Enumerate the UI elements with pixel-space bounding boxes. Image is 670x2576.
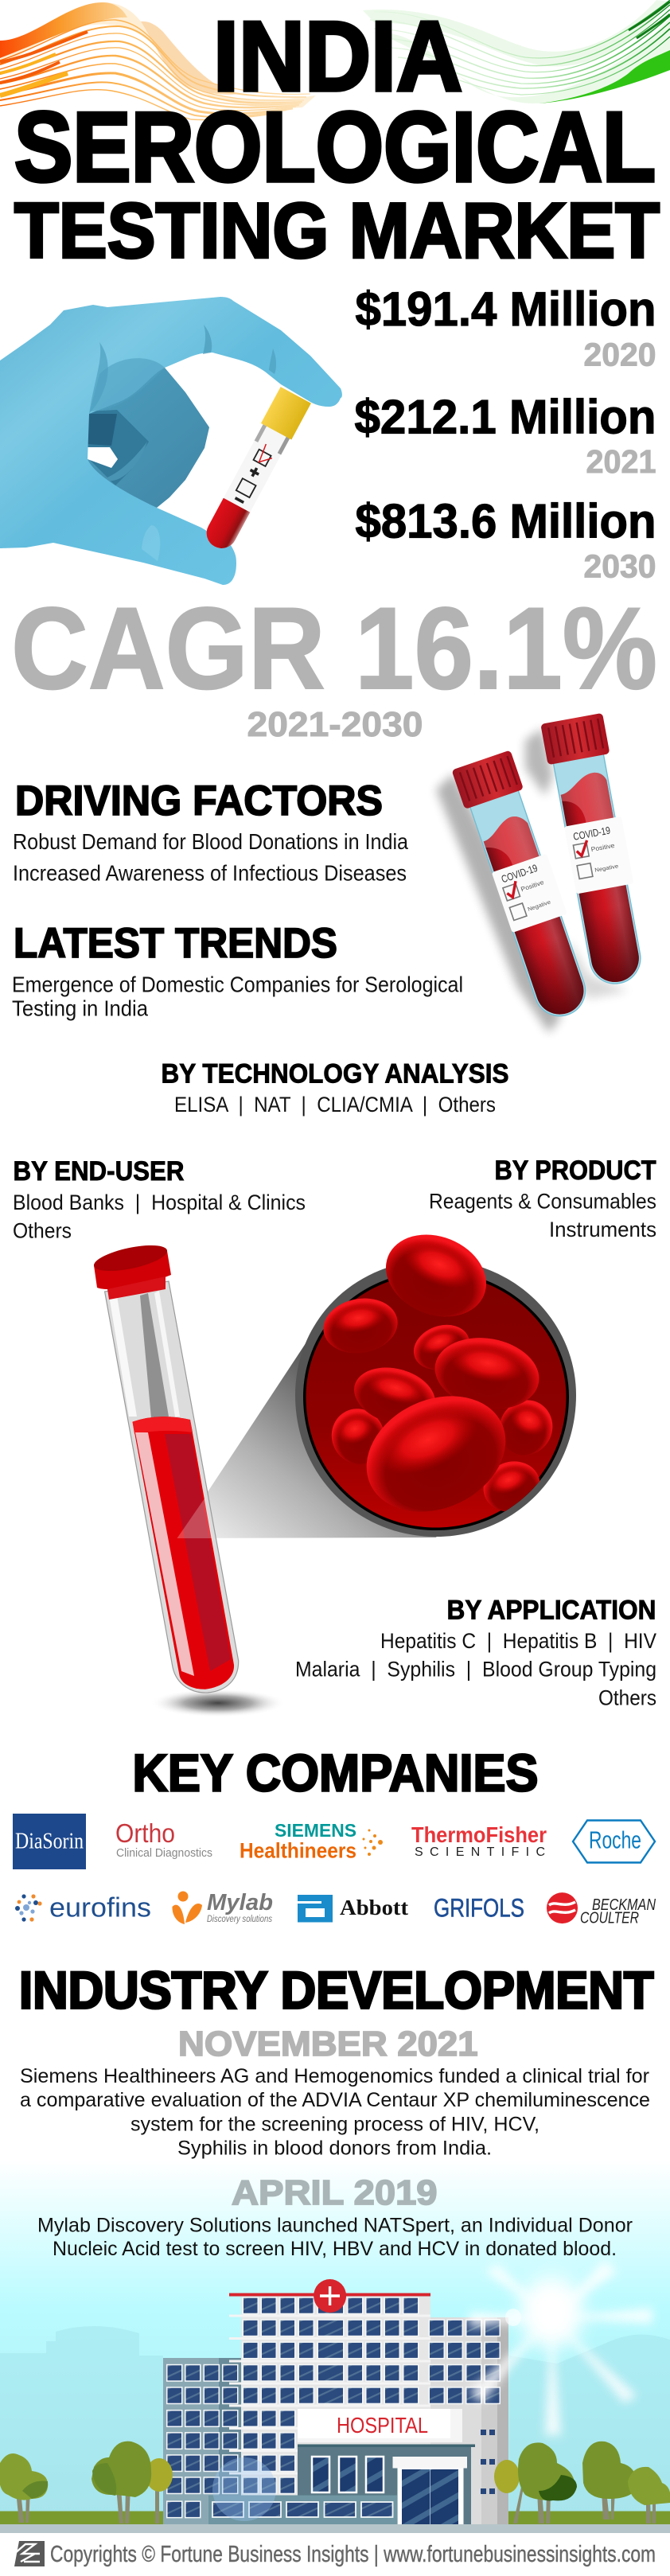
market value 2021: 2021 bbox=[586, 443, 656, 480]
latest trends: Emergence of Domestic Companies for Serological bbox=[12, 972, 463, 996]
hospital sign bbox=[298, 2409, 462, 2442]
latest trends: LATEST TRENDS bbox=[14, 920, 337, 967]
logo: Thermo Fisher Scientific: SCIENTIFIC bbox=[415, 1845, 545, 1859]
tall windows bbox=[312, 2457, 384, 2492]
tube: right: COVID-19 bbox=[572, 824, 611, 843]
logo: Ortho: Ortho bbox=[115, 1818, 175, 1848]
trees left bbox=[0, 2442, 173, 2523]
trees right bbox=[494, 2442, 670, 2523]
background skyline bbox=[0, 2326, 670, 2515]
by end-user bbox=[13, 1156, 306, 1243]
development: April 2019 bbox=[37, 2173, 633, 2260]
development: November 2021: NOVEMBER 2021 bbox=[178, 2025, 477, 2064]
magnified blood cells bbox=[208, 1235, 576, 1538]
road bbox=[0, 2524, 670, 2533]
tube: left: Negative bbox=[527, 900, 551, 913]
windows bbox=[166, 2297, 501, 2518]
small side windows bbox=[481, 2430, 495, 2494]
logo: Beckman Coulter: COULTER bbox=[580, 1910, 639, 1927]
entrance door bbox=[393, 2457, 467, 2524]
logo: Siemens Healthineers: SIEMENS bbox=[275, 1820, 356, 1841]
logo: DiaSorin: DiaSorin bbox=[15, 1829, 84, 1854]
logo: Siemens Healthineers: Healthineers bbox=[240, 1838, 356, 1862]
logo: Ortho bbox=[115, 1818, 212, 1860]
big test tube bbox=[92, 1241, 286, 1717]
icon: covid blood tubes bbox=[436, 713, 651, 1033]
by application: Others bbox=[598, 1686, 656, 1709]
logo: Grifols: GRIFOLS bbox=[434, 1894, 524, 1923]
logo: Roche bbox=[573, 1821, 655, 1862]
logo: Roche: Roche bbox=[589, 1826, 641, 1854]
latest trends bbox=[12, 920, 463, 1020]
main tower bbox=[241, 2297, 430, 2527]
title bbox=[14, 2, 660, 274]
flag wave: green bbox=[363, 0, 670, 103]
by end-user: Others bbox=[13, 1219, 72, 1243]
by product: BY PRODUCT bbox=[495, 1155, 656, 1186]
by end-user: Blood Banks | Hospital & Clinics bbox=[13, 1191, 306, 1214]
logo: Beckman Coulter bbox=[547, 1892, 656, 1927]
logo: DiaSorin bbox=[13, 1814, 86, 1869]
driving factors: DRIVING FACTORS bbox=[15, 777, 383, 824]
right wing bbox=[430, 2317, 508, 2524]
title: INDIA bbox=[213, 2, 462, 111]
sky backdrop bbox=[0, 2161, 670, 2535]
red cross badge bbox=[314, 2279, 346, 2313]
by application bbox=[295, 1595, 656, 1709]
market value 2021: $212.1 Million bbox=[355, 390, 656, 444]
development: April 2019: Mylab Discovery Solutions launched NATSpert, an Individual Donor bbox=[37, 2214, 633, 2236]
tube: left: COVID-19 bbox=[500, 862, 539, 885]
driving factors bbox=[13, 777, 408, 885]
logo: Siemens Healthineers bbox=[240, 1820, 383, 1862]
logo: Mylab: Mylab bbox=[207, 1890, 273, 1915]
logo: Ortho: Clinical Diagnostics bbox=[116, 1846, 212, 1860]
development: November 2021: Syphilis in blood donors from India. bbox=[177, 2138, 492, 2160]
logo: Abbott bbox=[298, 1895, 408, 1923]
development: April 2019: APRIL 2019 bbox=[232, 2173, 438, 2212]
roof bbox=[229, 2293, 430, 2297]
market value 2030: $813.6 Million bbox=[355, 495, 656, 548]
market value 2021 bbox=[355, 390, 656, 480]
logo: eurofins: eurofins bbox=[49, 1892, 151, 1923]
market value 2030: 2030 bbox=[584, 548, 656, 584]
tube: left bbox=[451, 750, 598, 1025]
logo: Mylab bbox=[172, 1890, 273, 1924]
by product: Instruments bbox=[549, 1218, 656, 1241]
by technology analysis: ELISA | NAT | CLIA/CMIA | Others bbox=[174, 1093, 496, 1117]
market value 2020 bbox=[355, 283, 656, 372]
logo: Abbott: Abbott bbox=[340, 1896, 408, 1919]
tube: right: Negative bbox=[594, 863, 619, 874]
by end-user: BY END-USER bbox=[13, 1156, 185, 1187]
flag wave: saffron bbox=[0, 2, 316, 120]
tube: right bbox=[540, 713, 651, 989]
market value 2030 bbox=[355, 495, 656, 584]
small test tube bbox=[199, 387, 311, 555]
market value 2020: $191.4 Million bbox=[355, 283, 656, 336]
by product bbox=[429, 1155, 656, 1241]
tube: left: Positive bbox=[520, 879, 545, 893]
market value 2020: 2020 bbox=[584, 336, 656, 372]
floor slabs bbox=[229, 2314, 430, 2475]
driving factors: Robust Demand for Blood Donations in India bbox=[13, 829, 408, 854]
ground bbox=[0, 2512, 670, 2524]
sun rays bbox=[469, 2260, 652, 2435]
by technology analysis: BY TECHNOLOGY ANALYSIS bbox=[161, 1058, 509, 1089]
logo: Thermo Fisher Scientific bbox=[411, 1822, 547, 1859]
development: April 2019: Nucleic Acid test to screen HIV, HBV and HCV in donated blood. bbox=[53, 2238, 617, 2260]
development: November 2021 bbox=[20, 2025, 650, 2160]
by application: BY APPLICATION bbox=[447, 1595, 656, 1625]
hospital sign: HOSPITAL bbox=[337, 2413, 428, 2438]
development: November 2021: Siemens Healthineers AG and Hemogenomics funded a clinical trial for bbox=[20, 2065, 649, 2087]
development: November 2021: system for the screening process of HIV, HCV, bbox=[130, 2114, 540, 2136]
low front wing bbox=[208, 2496, 397, 2524]
latest trends: Testing in India bbox=[12, 996, 148, 1020]
logo: Thermo Fisher Scientific: ThermoFisher bbox=[411, 1822, 547, 1847]
lens flare bbox=[212, 2457, 276, 2521]
heading: key companies: KEY COMPANIES bbox=[132, 1743, 538, 1802]
left wing bbox=[163, 2358, 241, 2524]
hospital scene bbox=[0, 2260, 670, 2533]
entrance block bbox=[298, 2445, 471, 2524]
by technology analysis bbox=[161, 1058, 509, 1117]
tube: right: Positive bbox=[590, 842, 616, 853]
CAGR: 2021-2030 bbox=[247, 705, 423, 744]
icon: fortune business insights logo bbox=[14, 2541, 45, 2566]
illustration: gloved hand holding test tube bbox=[0, 297, 342, 585]
development: November 2021: a comparative evaluation of the ADVIA Centaur XP chemiluminescence bbox=[20, 2089, 650, 2111]
logo: Beckman Coulter: BECKMAN bbox=[592, 1896, 656, 1914]
driving factors: Increased Awareness of Infectious Diseases bbox=[13, 861, 407, 885]
logo: Mylab: Discovery solutions bbox=[207, 1913, 272, 1924]
